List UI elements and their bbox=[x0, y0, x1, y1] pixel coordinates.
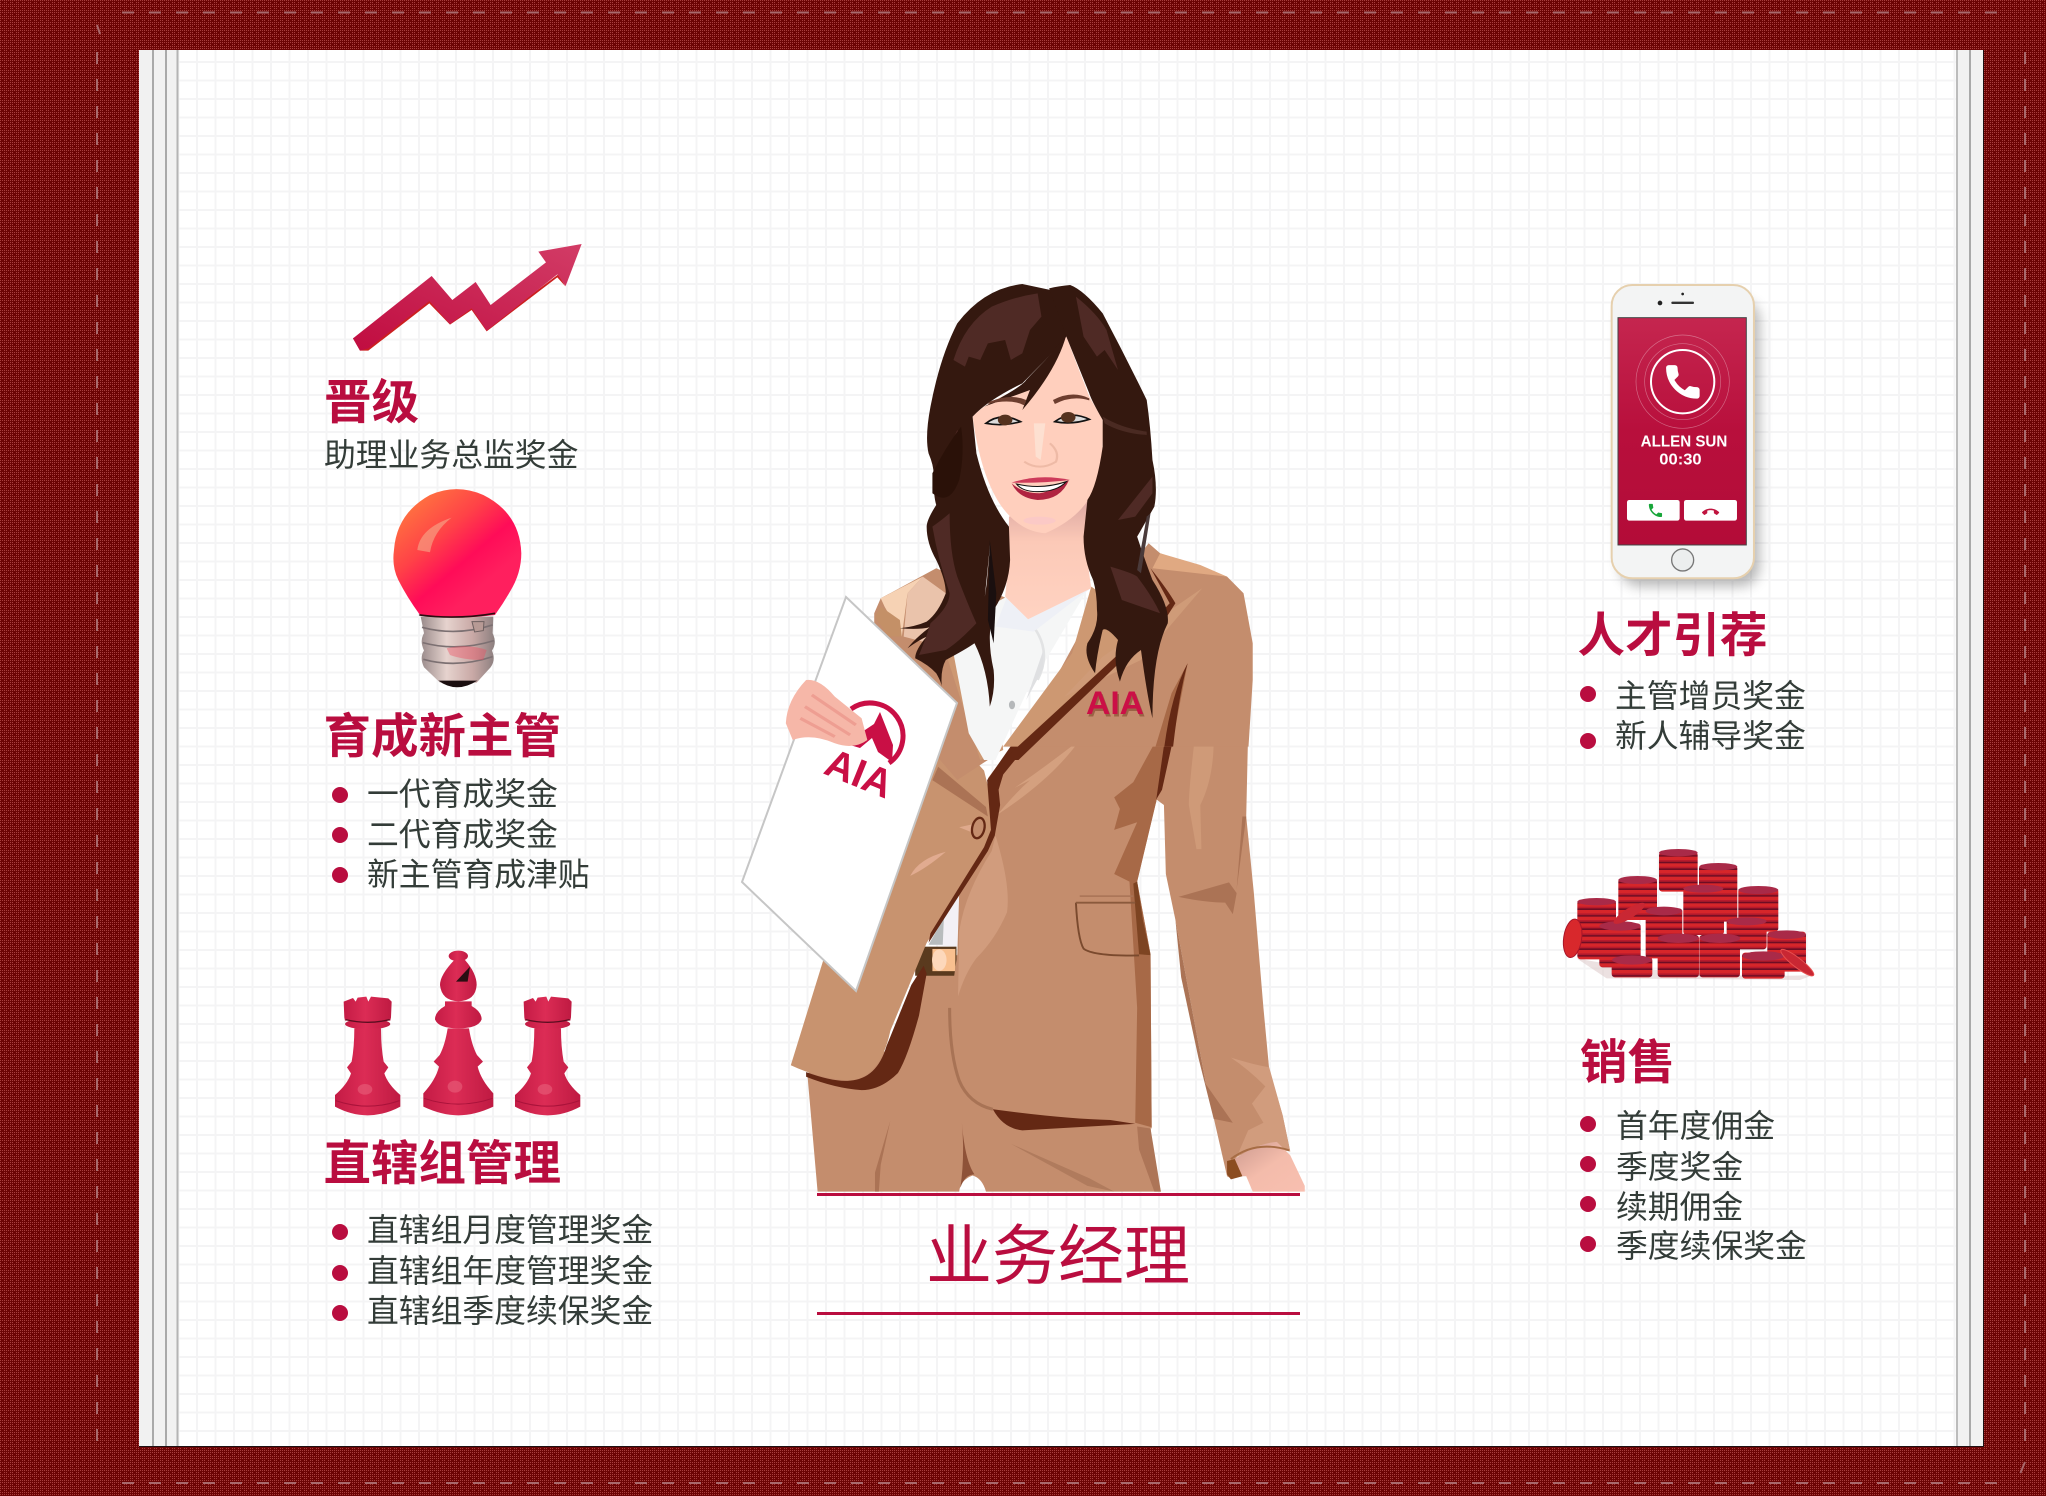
neck bbox=[1005, 500, 1091, 619]
icon: smartphone: ALLEN SUN bbox=[1641, 433, 1727, 450]
waist shirt bbox=[929, 893, 959, 947]
heading: direct team management: 直辖组管理 bbox=[324, 1138, 561, 1191]
list: direct team management: 直辖组月度管理奖金 bbox=[367, 1212, 653, 1248]
list: direct team management bbox=[332, 1212, 653, 1329]
icon: smartphone bbox=[1612, 285, 1760, 587]
title rules and job title bbox=[817, 1193, 1300, 1315]
AIA document bbox=[742, 597, 957, 991]
list: develop new supervisors: 新主管育成津贴 bbox=[367, 856, 590, 892]
heading: promotion: 晋级 bbox=[324, 377, 419, 430]
text: AIA badge: AIA bbox=[1086, 685, 1144, 721]
eyebrows bbox=[988, 397, 1026, 405]
list: talent referral: 新人辅导奖金 bbox=[1615, 718, 1806, 754]
icon: left rook bbox=[335, 997, 400, 1115]
icon: stacks of red coins bbox=[1561, 849, 1816, 980]
AIA lapel badge shadow: AIA bbox=[1088, 688, 1146, 724]
list: talent referral bbox=[1580, 678, 1806, 754]
heading: talent referral: 人才引荐 bbox=[1578, 610, 1768, 663]
hand bbox=[1235, 1142, 1305, 1192]
icon: right rook bbox=[515, 997, 580, 1115]
jacket chest and shoulder, viewer right bbox=[1019, 543, 1253, 747]
list: sales: 续期佣金 bbox=[1616, 1189, 1743, 1225]
sleeve bbox=[1156, 732, 1290, 1178]
illustration: businesswoman bbox=[791, 284, 1305, 1192]
lapel edge band bbox=[929, 732, 1038, 943]
mouth bbox=[1012, 480, 1069, 500]
list: develop new supervisors: 二代育成奖金 bbox=[367, 816, 558, 852]
hair highlights bbox=[919, 293, 1160, 655]
list: sales bbox=[1580, 1108, 1807, 1264]
heading: sales: 销售 bbox=[1580, 1037, 1675, 1090]
list: develop new supervisors bbox=[332, 776, 590, 892]
list: sales: 首年度佣金 bbox=[1616, 1108, 1775, 1144]
title rules and job title: 业务经理 bbox=[926, 1219, 1190, 1293]
icon: red light bulb bbox=[393, 489, 521, 687]
heading: develop new supervisors: 育成新主管 bbox=[324, 711, 561, 764]
hair, viewer left bbox=[900, 284, 1066, 707]
face bbox=[973, 337, 1103, 533]
icon: rising arrow bbox=[353, 244, 582, 351]
hair, viewer right bbox=[1049, 285, 1168, 718]
lower body and suit bbox=[791, 732, 1305, 1192]
shoulder, viewer left bbox=[874, 568, 1011, 780]
list: direct team management: 直辖组年度管理奖金 bbox=[367, 1253, 653, 1289]
icon: chess pieces bbox=[335, 951, 580, 1115]
nose bbox=[1034, 423, 1045, 460]
text: promotion bonus: 助理业务总监奖金 bbox=[324, 437, 578, 473]
eyes bbox=[986, 417, 1020, 425]
main jacket front bbox=[950, 732, 1172, 1128]
shirt bbox=[953, 587, 1089, 760]
left jacket front bbox=[791, 732, 994, 1081]
AIA logo bbox=[819, 703, 903, 807]
pocket bbox=[1076, 896, 1139, 956]
icon: bishop bbox=[423, 951, 493, 1115]
icon: smartphone: 00:30 bbox=[1659, 451, 1702, 468]
list: sales: 季度续保奖金 bbox=[1616, 1228, 1807, 1264]
list: sales: 季度奖金 bbox=[1616, 1149, 1743, 1185]
button bbox=[970, 817, 986, 839]
AIA logo: AIA bbox=[819, 741, 899, 807]
trousers bbox=[807, 954, 1161, 1192]
list: talent referral: 主管增员奖金 bbox=[1615, 678, 1806, 714]
list: develop new supervisors: 一代育成奖金 bbox=[367, 776, 558, 812]
list: direct team management: 直辖组季度续保奖金 bbox=[367, 1293, 653, 1329]
hand holding document bbox=[786, 680, 867, 746]
upper body, head and hair bbox=[874, 284, 1253, 780]
belt bbox=[915, 947, 957, 976]
